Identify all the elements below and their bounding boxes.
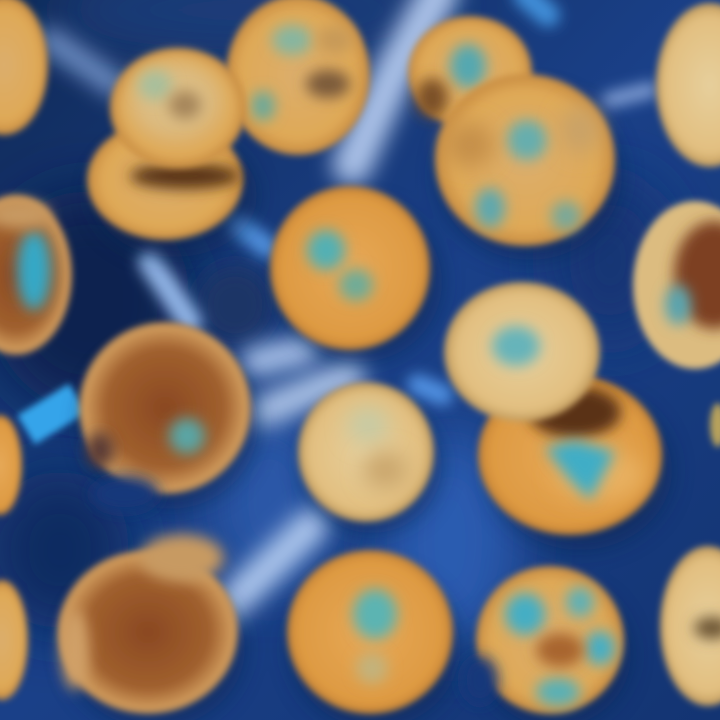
cookie: bottom left edge partial [0,580,28,700]
cookie: center pale [298,382,434,522]
cookie: bottom left brown bitten [58,534,238,714]
cookie: bottom right with teal spots [462,566,624,714]
cookie stack: upper left [87,48,246,240]
cookie shadows [65,90,672,720]
cookie: bottom right edge [660,546,720,706]
cookie: left brown with teal [0,195,72,355]
cookie: middle left brown bitten [79,322,251,512]
cookie stack: lower right [444,282,662,535]
cookie stack: upper right [408,16,615,246]
cookie: center orange [270,186,430,350]
light streaks [26,0,650,612]
cookie: right brown [633,201,720,369]
cookie: bottom center orange [287,550,453,714]
cookie: top center with teal spots [226,0,370,155]
cookie: top right [656,3,720,167]
cookie: top left partial [0,0,48,135]
cookie: right edge small [710,403,720,447]
cookie: left edge partial [0,415,22,515]
